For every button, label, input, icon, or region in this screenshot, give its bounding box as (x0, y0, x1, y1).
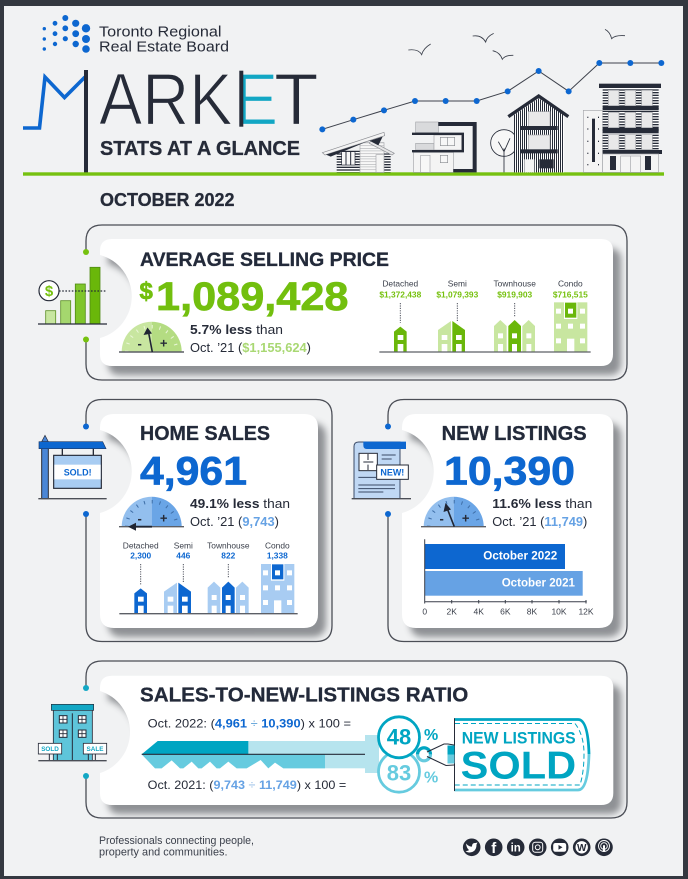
logo wordmark (99, 24, 229, 56)
comparison text: Oct. ’21 ($1,155,624) (190, 341, 311, 355)
comparison text: Oct. ’21 (11,749) (492, 514, 587, 529)
icon: instagram (529, 838, 546, 856)
home type counts: Townhouse (207, 541, 250, 551)
home type counts (123, 541, 290, 585)
bar chart: October 2021 (502, 576, 575, 590)
icon: facebook: f (491, 840, 497, 857)
card (402, 414, 621, 637)
bar chart: 4K (473, 607, 484, 617)
panel: average selling price (38, 225, 627, 380)
key graphic: % (424, 727, 438, 744)
icon: wordpress (573, 838, 590, 856)
home type counts: 446 (176, 550, 191, 560)
bar chart: 10K (551, 607, 567, 617)
home type prices: $1,372,438 (379, 290, 422, 300)
comparison text: 5.7% less than (190, 323, 283, 337)
tag: new listings sold: NEW LISTINGS (462, 728, 576, 747)
logo dots (43, 15, 90, 53)
panel: new listings (352, 400, 627, 642)
card (100, 414, 326, 637)
home type prices: Townhouse (494, 279, 536, 289)
comparison text (190, 496, 290, 529)
title: MARKET (23, 60, 319, 175)
bar chart: 0 (422, 607, 427, 617)
gauge (119, 497, 184, 531)
home type icons (119, 564, 298, 614)
home type prices: $716,515 (553, 290, 588, 300)
icon: bar chart with dollar: $ (45, 283, 54, 300)
logo wordmark: Real Estate Board (99, 39, 229, 56)
bar chart: 8K (527, 607, 538, 617)
comparison text: 49.1% less than (190, 496, 290, 511)
tag: new listings sold (448, 718, 589, 791)
panel: sales-to-new-listings ratio (38, 661, 627, 818)
home type prices: $1,079,393 (436, 290, 479, 300)
comparison text (492, 496, 592, 529)
icon: building with sold and sale signs: SOLD (41, 746, 59, 753)
home type counts: 822 (221, 550, 236, 560)
icon: wordpress: W (577, 843, 587, 854)
house 3 (508, 96, 568, 172)
line chart over houses (319, 60, 664, 132)
card (100, 239, 621, 375)
home type counts: Semi (174, 541, 193, 551)
footer tagline: property and communities. (99, 846, 228, 858)
bar chart: 12K (578, 607, 594, 617)
home type prices (379, 279, 588, 323)
footer tagline (99, 835, 254, 858)
skyline illustration (319, 29, 664, 172)
panel: home sales (38, 400, 332, 642)
stylised M line (23, 77, 85, 128)
comparison text: Oct. ’21 (9,743) (190, 514, 279, 529)
home type prices: Semi (448, 279, 467, 289)
panel frame (83, 400, 332, 642)
big number: 4,961 (140, 450, 247, 494)
title: MARKET: ARK (99, 60, 232, 141)
bar chart (422, 539, 594, 617)
big number: $ (140, 278, 154, 305)
icon: building with sold and sale signs: SALE (87, 746, 103, 753)
logo wordmark: Toronto Regional (99, 24, 222, 41)
home type counts: 2,300 (130, 550, 152, 560)
comparison text (190, 323, 311, 355)
tree (491, 130, 517, 172)
panel frame (83, 225, 627, 380)
green ground line (23, 172, 664, 176)
building 4 (583, 84, 662, 172)
house 1 (322, 132, 394, 172)
social icons (463, 838, 613, 857)
icon: new listing document: NEW! (380, 467, 404, 477)
home type icons (379, 302, 591, 352)
formula 2022: Oct. 2022: ( 4,961 ÷ 10,390) x 100 = (148, 717, 351, 731)
heading: HOME SALES (140, 423, 270, 445)
home type prices: Detached (382, 279, 419, 289)
icon: sold sign: SOLD! (64, 467, 92, 477)
bar chart: 6K (500, 607, 511, 617)
gauge (421, 497, 486, 527)
key graphic: 83 (387, 761, 411, 786)
icon: podcast (595, 838, 613, 856)
title: MARKET: E (235, 60, 278, 141)
heading: SALES-TO-NEW-LISTINGS RATIO (140, 685, 468, 707)
icon: twitter (463, 838, 481, 856)
panel frame (385, 400, 627, 642)
logo: Toronto Regional Real Estate Board (43, 15, 229, 56)
key graphic: % (424, 769, 438, 786)
panel frame (83, 661, 627, 818)
home type counts: Condo (265, 541, 290, 551)
icon: facebook (485, 838, 503, 857)
icon: youtube (551, 838, 568, 856)
big number: 1,089,428 (156, 275, 348, 319)
bar chart: October 2022 (483, 548, 558, 562)
heading: NEW LISTINGS (442, 423, 587, 445)
birds (408, 29, 625, 59)
date heading: OCTOBER 2022 (100, 190, 234, 210)
icon: linkedin (507, 838, 524, 856)
footer tagline: Professionals connecting people, (99, 835, 254, 847)
home type counts: Detached (123, 541, 159, 551)
subtitle: STATS AT A GLANCE (100, 138, 300, 160)
formula 2021: Oct. 2021: ( 9,743 ÷ 11,749) x 100 = (148, 778, 346, 792)
key graphic (142, 717, 454, 792)
house 2 (412, 122, 477, 172)
tag: new listings sold: SOLD (461, 744, 576, 787)
icon: linkedin: in (511, 842, 521, 854)
gauge (119, 322, 184, 352)
key graphic: 48 (387, 724, 411, 750)
home type prices: $919,903 (497, 290, 533, 300)
icon: new listing document (352, 442, 411, 499)
icon: bar chart with dollar (38, 267, 107, 324)
bar chart: 2K (446, 607, 457, 617)
big number: 10,390 (444, 450, 575, 494)
icon: building with sold and sale signs (38, 704, 107, 761)
comparison text: 11.6% less than (492, 496, 592, 511)
title: MARKET: T (274, 60, 319, 141)
home type counts: 1,338 (267, 550, 288, 560)
heading: AVERAGE SELLING PRICE (140, 249, 389, 271)
icon: sold sign (38, 435, 107, 499)
card (100, 676, 621, 814)
home type prices: Condo (558, 279, 583, 289)
